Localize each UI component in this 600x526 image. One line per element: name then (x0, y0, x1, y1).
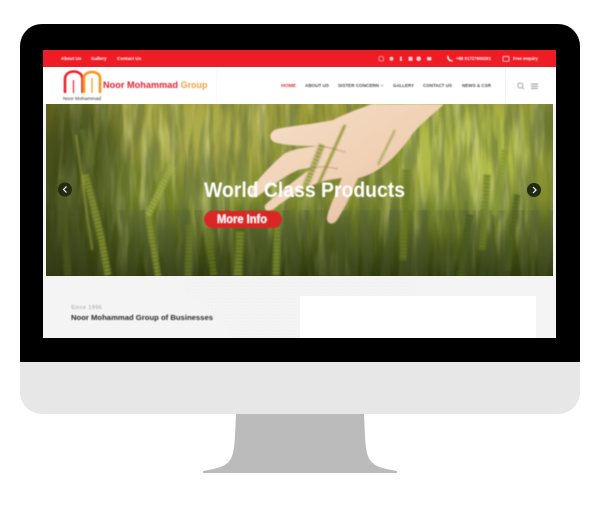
main menu: GALLERY (393, 83, 415, 89)
phone icon and number: +88 01727900281 (456, 56, 492, 61)
dotted world map background (186, 279, 300, 338)
slider next arrow (527, 183, 541, 197)
logo: Group (180, 80, 208, 91)
about section (70, 296, 536, 338)
more info button: More Info (217, 214, 267, 226)
top bar links (61, 56, 142, 61)
bottom shading (46, 208, 553, 276)
hero heading: World Class Products (204, 179, 405, 202)
monitor bezel (20, 24, 580, 362)
page background (43, 104, 556, 338)
monitor mockup (20, 24, 580, 473)
left shading (46, 104, 112, 276)
dotted world map right portion (300, 279, 415, 296)
hand (250, 104, 444, 224)
main menu: ABOUT US (305, 83, 330, 89)
main menu: SISTER CONCERN (338, 83, 380, 89)
more info button (204, 211, 282, 228)
top bar links: About Us (61, 56, 82, 61)
top red bar (43, 50, 556, 67)
enquiry icon and link (503, 56, 539, 61)
website screen (35, 50, 563, 338)
since label: Since 1996 (71, 305, 102, 311)
logo (63, 72, 208, 102)
top bar links: Gallery (91, 56, 107, 61)
dark grass texture (46, 104, 553, 232)
main menu (280, 83, 492, 88)
wheat stalks (62, 104, 517, 276)
social icons (379, 56, 432, 61)
stalks in front of hand (300, 125, 395, 200)
logo: Noor Mohammad (63, 96, 101, 102)
hero photo: wheat field (46, 104, 553, 276)
main menu: NEWS & CSR (462, 83, 491, 89)
search icon (518, 83, 524, 89)
section heading: Noor Mohammad Group of Businesses (71, 313, 213, 322)
top bar links: Contact Us (117, 56, 142, 61)
navigation bar (43, 67, 556, 104)
logo: Noor Mohammad (103, 80, 178, 91)
enquiry icon and link: Free enquiry (513, 56, 539, 61)
monitor stand (203, 414, 397, 473)
phone icon and number (447, 56, 492, 62)
light grass texture (46, 104, 553, 276)
slider previous arrow (58, 182, 72, 196)
white content panel (300, 296, 536, 338)
monitor chin (20, 362, 580, 414)
dark grass texture at bottom (118, 210, 553, 254)
background tones (46, 104, 553, 244)
main menu: HOME (281, 83, 297, 89)
menu icon (531, 84, 538, 89)
main menu: CONTACT US (423, 83, 453, 89)
